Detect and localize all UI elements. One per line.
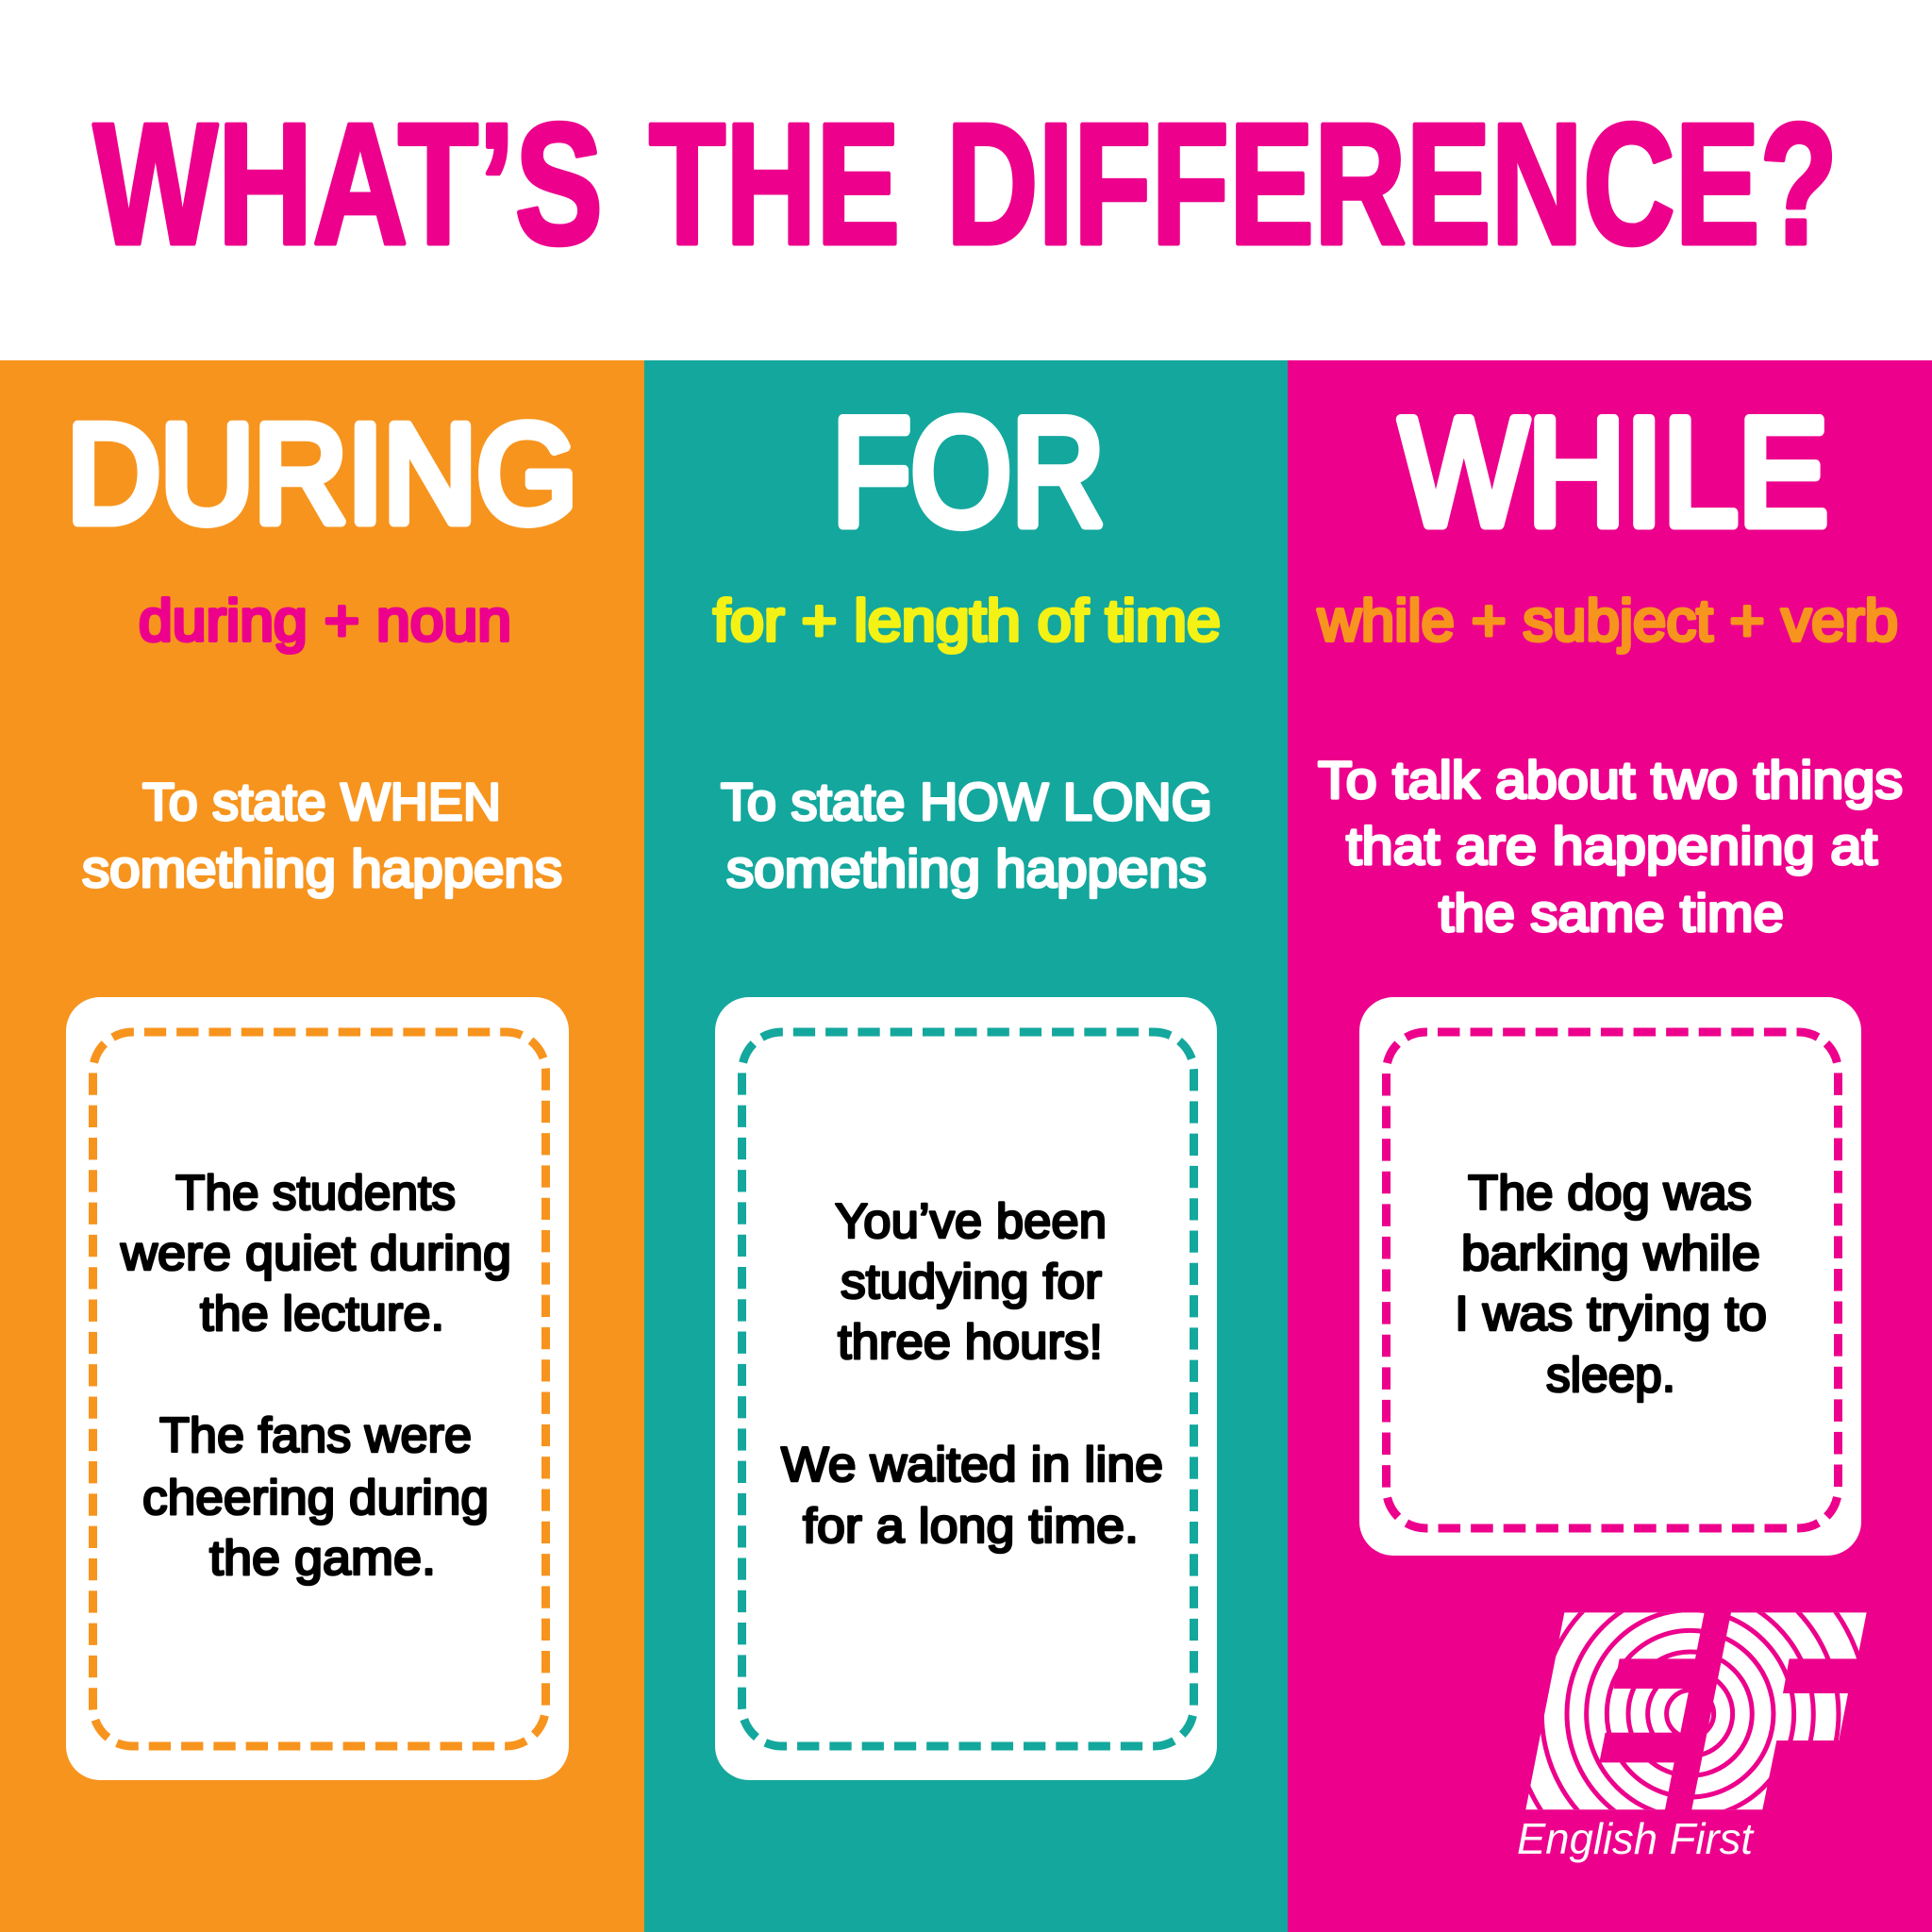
heading: during: DURING bbox=[67, 396, 577, 552]
example text: during: the lecture. bbox=[200, 1287, 444, 1341]
heading: for: FOR bbox=[832, 387, 1105, 558]
panel: for bbox=[644, 360, 1288, 1932]
description: for bbox=[721, 772, 1212, 898]
description: during: something happens bbox=[82, 839, 562, 898]
example text: while: barking while bbox=[1461, 1226, 1760, 1281]
example text: for: three hours! bbox=[838, 1315, 1103, 1370]
title: WHAT’S bbox=[93, 87, 603, 280]
description: for: To state HOW LONG bbox=[721, 772, 1212, 831]
description: while: the same time bbox=[1439, 883, 1784, 942]
example text: while: sleep. bbox=[1546, 1348, 1675, 1403]
card: during examples bbox=[66, 997, 569, 1780]
example text: for: We waited in line bbox=[781, 1438, 1163, 1492]
example text: for: studying for bbox=[841, 1255, 1102, 1309]
example text: during: were quiet during bbox=[120, 1226, 511, 1281]
formula: while + subject + verb: while + subject + verb bbox=[1317, 589, 1898, 654]
heading: while: WHILE bbox=[1400, 387, 1828, 558]
panel: while bbox=[1288, 360, 1932, 1932]
description: while: To talk about two things bbox=[1318, 750, 1903, 809]
example text: for: for a long time. bbox=[803, 1499, 1139, 1554]
card: while example bbox=[1359, 997, 1861, 1556]
description: during: To state WHEN bbox=[142, 772, 501, 831]
example text: during: The students bbox=[175, 1166, 456, 1221]
example text: while: I was trying to bbox=[1455, 1287, 1767, 1341]
example text: during: cheering during bbox=[142, 1471, 489, 1525]
example text: while: The dog was bbox=[1468, 1166, 1752, 1221]
description: for: something happens bbox=[726, 839, 1207, 898]
formula: for + length of time: for + length of time bbox=[713, 589, 1221, 654]
description: during bbox=[82, 772, 562, 898]
icon: EF mark bbox=[1525, 1612, 1867, 1809]
example text: for: You’ve been bbox=[835, 1194, 1107, 1249]
card: for examples bbox=[715, 997, 1217, 1780]
example text: for bbox=[781, 1194, 1163, 1554]
logo: EF English First bbox=[1518, 1612, 1867, 1862]
title bbox=[93, 87, 1838, 280]
title: THE bbox=[649, 87, 900, 280]
example text: during: The fans were bbox=[159, 1408, 472, 1463]
example text: during bbox=[120, 1166, 511, 1586]
logo wordmark: English First bbox=[1517, 1814, 1755, 1863]
formula: during + noun: during + noun bbox=[139, 589, 511, 654]
panel: during bbox=[0, 360, 644, 1932]
description: while: that are happening at bbox=[1346, 816, 1877, 875]
example text: while bbox=[1455, 1166, 1767, 1403]
description: while bbox=[1318, 750, 1903, 942]
example text: during: the game. bbox=[209, 1531, 436, 1586]
